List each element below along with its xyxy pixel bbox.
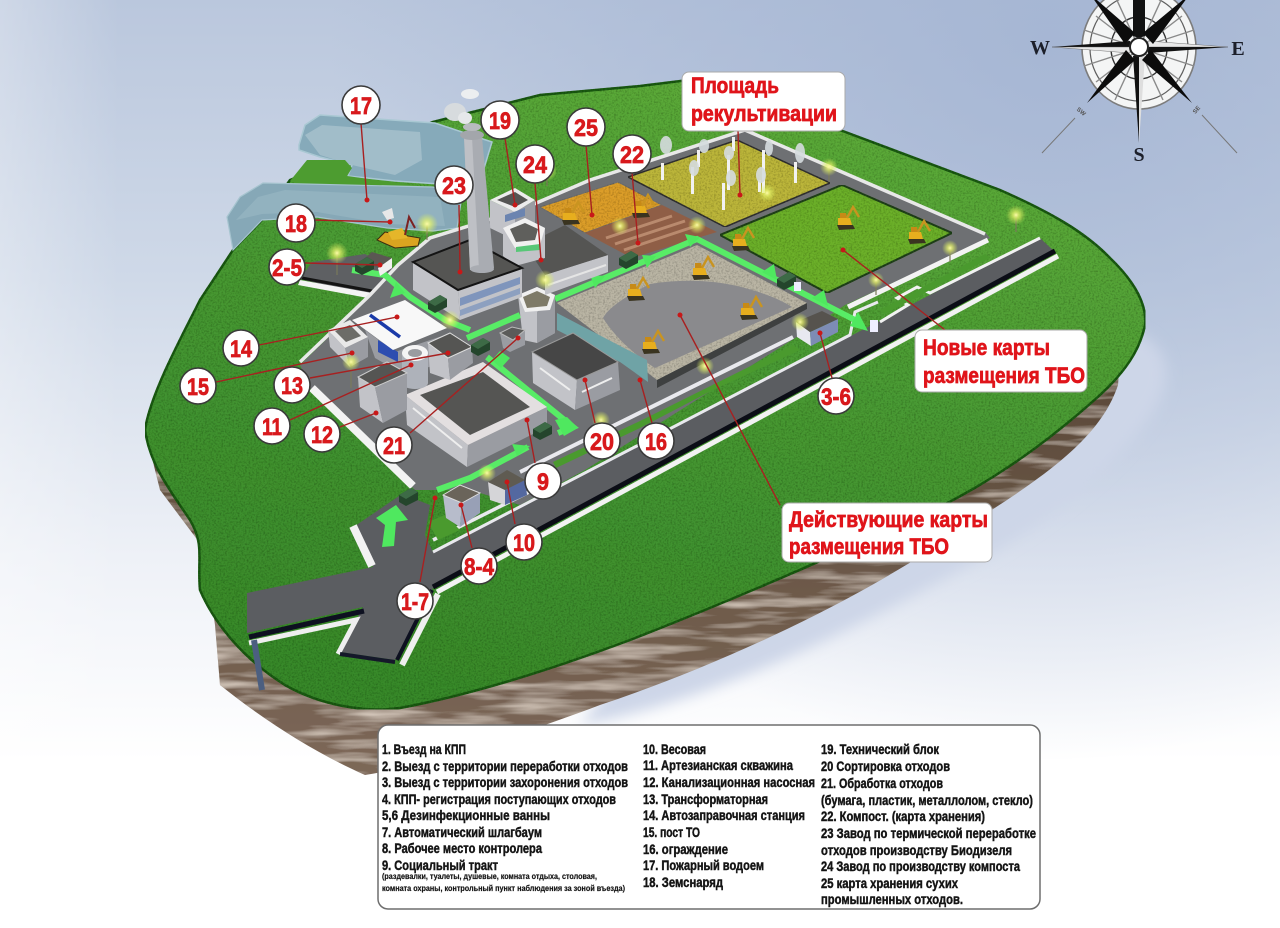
legend column 3 <box>821 742 1036 907</box>
callout 9 <box>525 463 561 499</box>
pond 17: fire reservoir <box>227 115 492 250</box>
callout 13: 13 <box>281 373 303 400</box>
callout 15 <box>180 368 216 404</box>
lights <box>326 158 1026 482</box>
island shadow <box>580 330 1166 725</box>
label: new waste cards: размещения ТБО <box>923 363 1085 388</box>
callout 1-7: 1-7 <box>401 589 429 616</box>
label: active waste cards: Действующие карты <box>789 507 988 532</box>
building 13: transformer <box>428 333 473 380</box>
green strips between roads <box>428 254 990 540</box>
callout 24: 24 <box>523 152 548 179</box>
building 15: maintenance post <box>328 320 368 367</box>
label: active waste cards <box>782 503 992 562</box>
callout 11 <box>254 408 290 444</box>
gate building 8-4: checkpoint <box>443 485 480 527</box>
legend column 1: 1. Въезд на КПП <box>382 742 466 757</box>
callout 24 <box>516 145 554 183</box>
gate building 10: scales <box>488 470 527 505</box>
building 24: compost plant <box>525 225 608 295</box>
island grass <box>145 78 1145 709</box>
legend column 2: 17. Пожарный водоем <box>643 858 764 873</box>
field 25: dry industrial waste <box>540 182 662 233</box>
green route arrows <box>352 234 868 547</box>
callout 2-5 <box>269 249 305 285</box>
legend column 2: 14. Автозаправочная станция <box>643 808 805 823</box>
legend column 1: (раздевалки, туалеты, душевые, комната отдыха, столовая, <box>382 872 597 881</box>
perimeter fence 16 <box>300 130 988 540</box>
callout 8-4 <box>461 548 497 584</box>
legend column 2: 12. Канализационная насосная <box>643 775 815 790</box>
legend column 2: 16. ограждение <box>643 842 728 857</box>
callout 19 <box>481 101 519 139</box>
callout 16 <box>638 423 674 459</box>
building 11/12: sewage pump <box>358 362 407 423</box>
callout 14 <box>223 330 259 366</box>
callout 22 <box>613 135 651 173</box>
callout 14: 14 <box>230 336 253 363</box>
callout 21: 21 <box>383 433 405 460</box>
callout 20: 20 <box>590 429 614 456</box>
compass rose: SW <box>1075 107 1087 118</box>
hexagon building <box>503 218 545 266</box>
hexagonal tower <box>518 287 555 343</box>
active landfill <box>557 245 807 388</box>
compass rose: W <box>1030 37 1050 59</box>
island soil <box>150 360 1120 775</box>
artesian well cylinder <box>402 345 428 389</box>
legend column 2: 13. Трансформаторная <box>643 792 768 807</box>
leader lines <box>216 123 945 582</box>
label: reclamation area: Площадь <box>691 73 779 98</box>
numbered callouts <box>180 86 854 619</box>
legend column 3: 23 Завод по термической переработке <box>821 826 1036 841</box>
callout 17: 17 <box>350 93 372 120</box>
legend column 3: отходов производству Биодизеля <box>821 843 1012 858</box>
legend column 3: 25 карта хранения сухих <box>821 876 958 891</box>
callout 25 <box>567 108 605 146</box>
callout 8-4: 8-4 <box>464 554 495 581</box>
compass rose: SE <box>1192 105 1202 115</box>
building 21: waste treatment <box>405 362 547 467</box>
heavy machinery <box>562 195 930 354</box>
lamp posts <box>337 167 1016 388</box>
legend column 1: 8. Рабочее место контролера <box>382 841 542 856</box>
smokestack <box>444 89 494 273</box>
legend column 2: 18. Земснаряд <box>643 875 723 890</box>
legend column 2: 10. Весовая <box>643 742 706 757</box>
legend column 1: 4. КПП- регистрация поступающих отходов <box>382 792 616 807</box>
callout 10: 10 <box>513 530 535 557</box>
legend column 3: промышленных отходов. <box>821 892 963 907</box>
building 23: thermal plant <box>413 240 522 320</box>
access road to exit 2 <box>298 254 396 298</box>
legend column 1: 9. Социальный тракт <box>382 858 498 873</box>
callout 23: 23 <box>442 173 466 200</box>
compass rose <box>1030 0 1245 166</box>
main entrance road <box>247 238 1058 690</box>
legend column 2: 15. пост ТО <box>643 825 700 840</box>
callout 13 <box>274 367 310 403</box>
dredger 18 <box>377 208 420 248</box>
callout 16: 16 <box>645 429 667 456</box>
small block: waste reception <box>500 327 525 352</box>
compost field <box>585 205 717 258</box>
field: new waste cards <box>720 185 952 293</box>
callout 1-7 <box>397 583 433 619</box>
callout 18: 18 <box>285 211 307 238</box>
legend column 1: 7. Автоматический шлагбаум <box>382 825 542 840</box>
legend column 2 <box>643 742 815 890</box>
label: new waste cards: Новые карты <box>923 335 1050 360</box>
legend column 1 <box>382 742 628 893</box>
upper pond <box>299 115 492 188</box>
field: reclamation area <box>628 140 830 227</box>
legend column 1: 2. Выезд с территории переработки отходов <box>382 759 628 774</box>
label: active waste cards: размещения ТБО <box>789 534 949 559</box>
legend column 1: 3. Выезд с территории захоронения отходов <box>382 775 628 790</box>
compass rose: S <box>1133 144 1145 166</box>
reclamation vents <box>660 136 805 210</box>
callout 3-6 <box>818 378 854 414</box>
callout 22: 22 <box>620 142 644 169</box>
legend column 1: 5,6 Дезинфекционные ванны <box>382 808 550 823</box>
legend column 3: 20 Сортировка отходов <box>821 759 950 774</box>
callout 19: 19 <box>489 108 511 135</box>
legend column 2: 11. Артезианская скважина <box>643 758 793 773</box>
building 20: sorting <box>532 333 620 410</box>
legend column 1: комната охраны, контрольный пункт наблюдения за зоной въезда) <box>382 884 625 893</box>
trucks and gates <box>355 251 878 506</box>
legend column 3: 24 Завод по производству компоста <box>821 859 1020 874</box>
callout 2-5: 2-5 <box>272 255 302 282</box>
callout 21 <box>376 427 412 463</box>
legend column 3: (бумага, пластик, металлолом, стекло) <box>821 793 1033 808</box>
plant site ground <box>300 130 990 505</box>
callout 17 <box>342 86 380 124</box>
legend panel <box>378 725 1040 909</box>
label: reclamation area <box>682 72 845 131</box>
callout 15: 15 <box>187 374 209 401</box>
building 14: fuel station <box>352 300 447 375</box>
building 19: technical block <box>490 188 535 240</box>
building 2-5: exit checkpoint <box>360 252 392 276</box>
lower pond <box>227 183 462 250</box>
callout 11: 11 <box>262 414 282 441</box>
building 3-6: exit checkpoint <box>796 311 838 346</box>
compass rose: E <box>1231 38 1245 60</box>
legend column 3: 19. Технический блок <box>821 742 939 757</box>
callout 25: 25 <box>574 115 598 142</box>
callout 3-6: 3-6 <box>821 384 851 411</box>
legend column 3: 22. Компост. (карта хранения) <box>821 809 985 824</box>
green bank between ponds <box>290 160 433 188</box>
callout 20 <box>584 423 620 459</box>
label: new waste cards <box>915 330 1087 392</box>
callout 23 <box>435 166 473 204</box>
legend column 3: 21. Обработка отходов <box>821 776 943 791</box>
label: reclamation area: рекультивации <box>691 101 837 126</box>
callout 12 <box>304 416 340 452</box>
callout 9: 9 <box>537 469 549 496</box>
callout 12: 12 <box>311 422 333 449</box>
callout 18 <box>277 204 315 242</box>
callout 10 <box>506 524 542 560</box>
